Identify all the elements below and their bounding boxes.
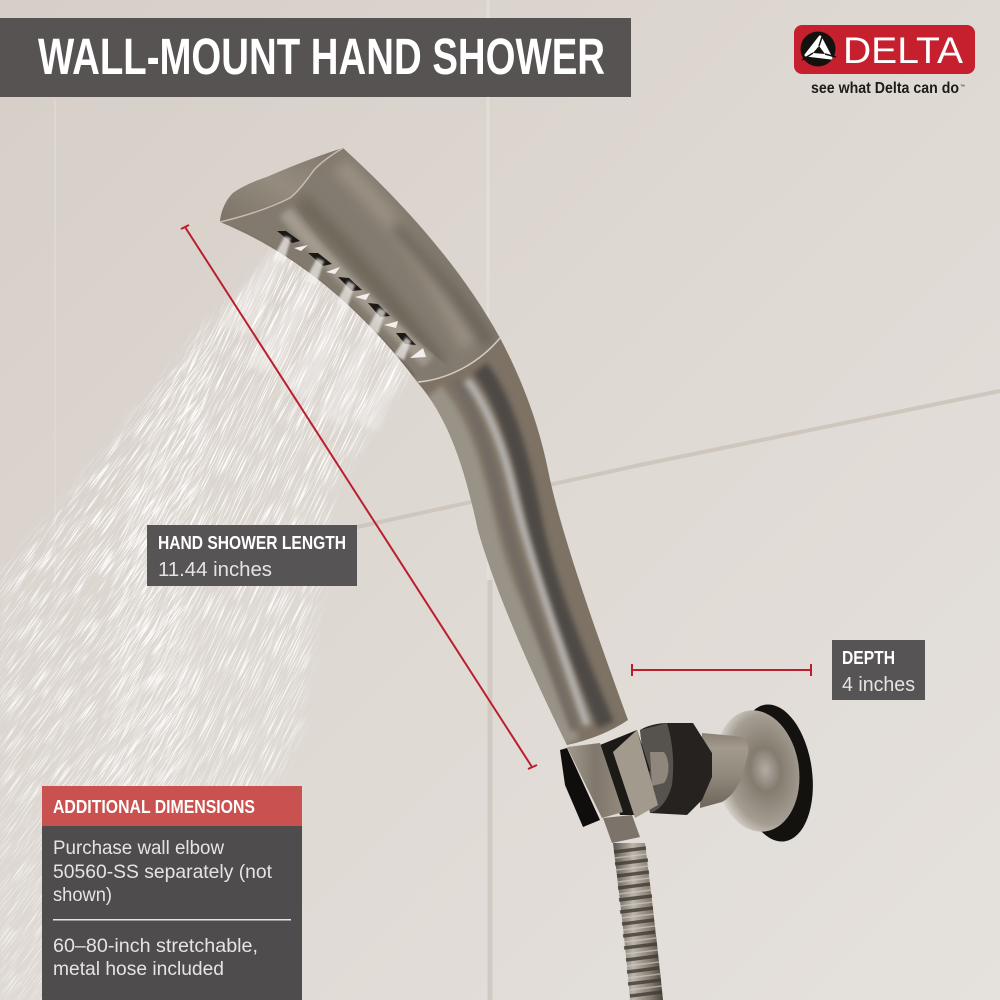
callout: hand shower length: HAND SHOWER LENGTH [158,533,346,553]
mid shadow [455,380,575,730]
water jets at nozzles [273,236,411,360]
wall elbow mount [640,700,821,846]
hand shower head [220,148,500,383]
nozzle slots [277,231,426,358]
panel: additional dimensions [42,786,302,1000]
hose [613,843,663,1000]
title banner [0,18,631,97]
panel body [42,826,302,1000]
underside band [222,222,442,383]
elbow arm [700,733,748,808]
hand shower holder clip [560,730,658,843]
black flange ring [729,700,821,846]
panel heading [42,786,302,826]
panel body: metal hose included [53,958,224,980]
black connector [640,723,712,815]
panel body: 60–80-inch stretchable, [53,935,258,957]
panel body: 50560-SS separately (not [53,861,273,883]
hand shower handle [418,338,628,745]
top lip [220,148,343,222]
head shell shading [220,148,500,383]
title banner: WALL-MOUNT HAND SHOWER [38,28,605,85]
joint seam [418,338,500,382]
panel heading: ADDITIONAL DIMENSIONS [53,797,255,817]
water spray [100,240,412,702]
Delta logo: ™ [960,84,965,90]
callout: depth: 4 inches [842,674,915,696]
Delta logo: DELTA [843,30,963,71]
icon: Delta triangle mark [800,32,836,66]
brushed left band [430,395,565,745]
bright stripe [467,380,587,725]
panel body: Purchase wall elbow [53,837,225,859]
dimension line: hand shower length [181,225,537,769]
Delta logo: see what Delta can do [811,80,959,97]
dimension line: depth [632,664,811,676]
swivel pin [650,752,668,786]
Delta logo [794,25,975,97]
callout: depth [832,640,925,700]
connector face [640,723,673,813]
callout: hand shower length [147,525,357,586]
panel body: shown) [53,884,112,906]
metal flange [707,705,807,837]
callout: hand shower length: 11.44 inches [158,559,272,581]
dark reflection [480,368,606,725]
callout: depth: DEPTH [842,648,895,668]
